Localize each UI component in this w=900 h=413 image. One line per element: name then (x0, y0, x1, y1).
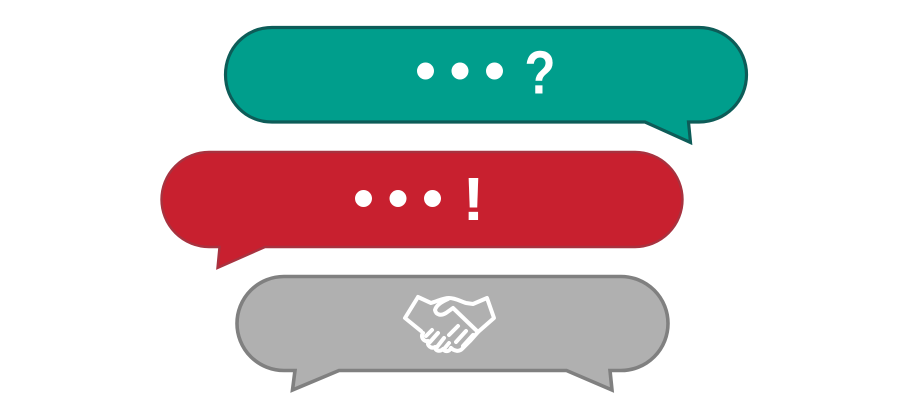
bubble shape: teal (226, 28, 746, 142)
panel: grey agreement bubble (237, 276, 668, 390)
bubble shape: grey (237, 276, 668, 390)
right fingers (449, 326, 473, 346)
thumb and clasp (435, 299, 478, 351)
question mark: ? (524, 38, 556, 107)
cuffs and upper hands (405, 297, 494, 332)
left fingers (422, 333, 451, 351)
dots: ellipsis (355, 190, 441, 207)
dots: ellipsis (417, 62, 503, 80)
panel: teal question bubble (226, 28, 746, 142)
icon: handshake (405, 297, 494, 351)
bubble shape: red (162, 152, 682, 268)
exclamation mark: ! (462, 164, 485, 233)
panel: red exclamation bubble (162, 152, 682, 268)
